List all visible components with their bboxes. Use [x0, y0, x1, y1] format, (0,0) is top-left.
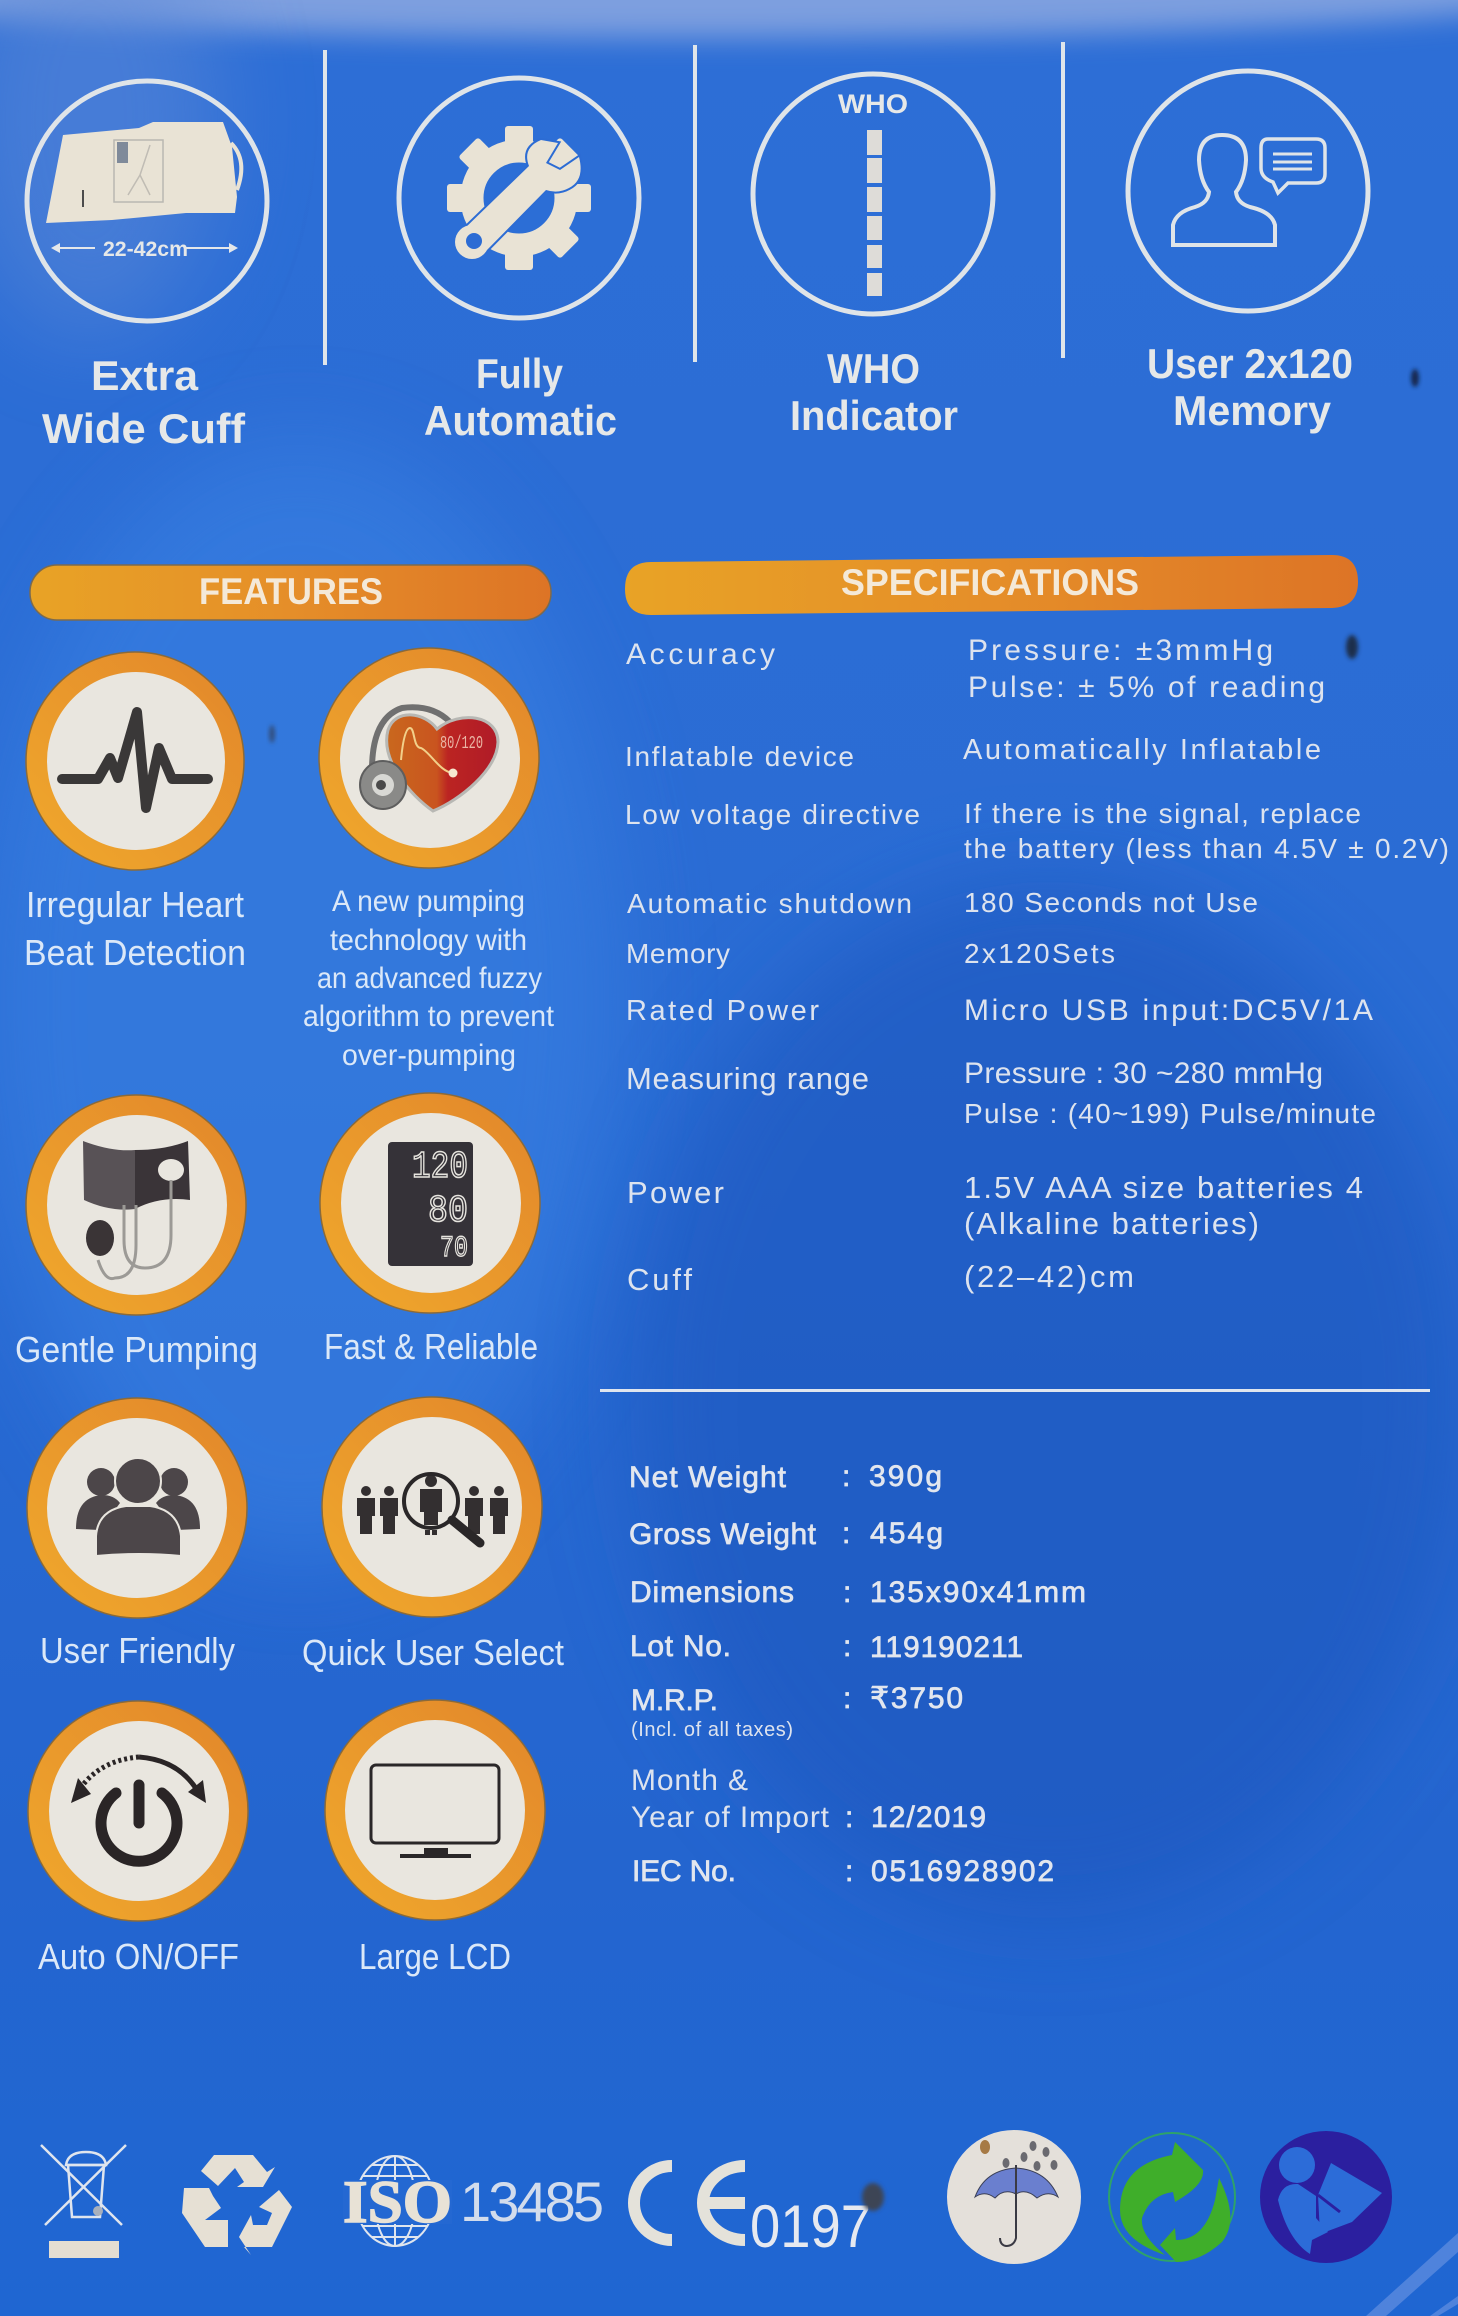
icon: recycling arrows [182, 2155, 292, 2255]
row: Memory: 2x120Sets [964, 938, 1115, 969]
text: pumping technology description: technology with [330, 924, 527, 957]
row: Lot No.: Lot No. [630, 1630, 731, 1663]
heading: FEATURES banner: FEATURES [199, 571, 383, 612]
icon: LCD readings: 70 [440, 1232, 468, 1266]
row: Power: Power [627, 1175, 724, 1210]
heading: Extra Wide Cuff: Wide Cuff [42, 405, 246, 452]
text: Gentle Pumping: Gentle Pumping [15, 1329, 258, 1370]
row: Accuracy: Pressure: ±3mmHg [968, 634, 1273, 667]
icon: heart and stethoscope [319, 648, 539, 868]
row: Lot No.: 119190211 [870, 1631, 1023, 1664]
icon: cuff and pump bulb [26, 1095, 246, 1315]
icon: user with memory bubble [1128, 71, 1368, 311]
text: Irregular Heart Beat Detection: Irregular Heart [26, 884, 244, 925]
panel: top feature icons [27, 42, 1368, 452]
text: Auto ON/OFF: Auto ON/OFF [38, 1936, 239, 1977]
row: Rated Power: Micro USB input:DC5V/1A [964, 994, 1373, 1027]
text: pumping technology description: over-pumping [342, 1039, 516, 1072]
icon: irregular heartbeat [26, 652, 244, 870]
row: Dimensions: : [843, 1576, 851, 1609]
heading: Extra Wide Cuff: Extra [91, 352, 199, 399]
row: Measuring range: Pulse : (40~199) Pulse/minute [964, 1098, 1376, 1129]
row: Gross Weight: Gross Weight [629, 1518, 817, 1551]
text: pumping technology description: an advanced fuzzy [317, 962, 542, 995]
panel: specifications table [625, 634, 1449, 1297]
panel: product details [629, 1460, 1086, 1888]
row: Net Weight: Net Weight [629, 1461, 787, 1494]
icon: keep dry umbrella [947, 2130, 1081, 2264]
heading: User 2x120 Memory [1147, 340, 1353, 434]
icon: magnifier selecting user [322, 1397, 542, 1617]
heading: User 2x120 Memory: User 2x120 [1147, 340, 1353, 387]
icon: WEEE crossed-out bin [41, 2145, 126, 2258]
panel: features [15, 648, 564, 1977]
text: pumping technology description [303, 885, 555, 1072]
row: Net Weight: : [842, 1460, 850, 1493]
icon: ISO 13485 mark [343, 2156, 604, 2246]
heading: FEATURES banner [30, 565, 551, 620]
row: Inflatable device: Inflatable device [625, 741, 854, 772]
row: Accuracy [626, 634, 1325, 704]
row: M.R.P. [631, 1682, 963, 1741]
icon: extra wide cuff: 22-42cm [103, 238, 188, 261]
row: Rated Power [626, 994, 1373, 1027]
row: Power: 1.5V AAA size batteries 4 [964, 1170, 1363, 1205]
row: Lot No.: : [843, 1630, 851, 1663]
row: Low voltage directive: Low voltage directive [625, 799, 920, 830]
heading: Fully Automatic: Fully [476, 350, 564, 397]
row: Automatic shutdown [627, 887, 1258, 919]
row: Month & Year of Import: : [845, 1801, 853, 1834]
row: Month & Year of Import: Year of Import [631, 1801, 830, 1834]
row: Dimensions: Dimensions [630, 1576, 794, 1609]
icon: CE 0197 mark: 0197 [750, 2193, 871, 2260]
text: Fast & Reliable: Fast & Reliable [324, 1326, 538, 1367]
heading: User 2x120 Memory: Memory [1173, 387, 1332, 434]
icon: gear and wrench [399, 78, 639, 318]
row: Lot No. [630, 1630, 1023, 1664]
icon: large LCD monitor [325, 1700, 545, 1920]
row: M.R.P.: : [843, 1682, 851, 1715]
heading: WHO Indicator: WHO [827, 345, 920, 392]
text: Quick User Select: Quick User Select [302, 1632, 564, 1673]
text: pumping technology description: A new pumping [332, 885, 525, 918]
row: Measuring range: Pressure : 30 ~280 mmHg [964, 1057, 1323, 1090]
row: Net Weight: 390g [869, 1460, 942, 1493]
icon: LCD readings: 120 [412, 1146, 468, 1189]
text: pumping technology description: algorithm to prevent [303, 1000, 555, 1033]
row: Accuracy: Pulse: ± 5% of reading [968, 671, 1325, 704]
row: IEC No.: : [845, 1855, 853, 1888]
row: IEC No.: IEC No. [632, 1855, 736, 1888]
row: Measuring range: Measuring range [626, 1061, 869, 1096]
row: Inflatable device: Automatically Inflatable [963, 734, 1321, 766]
row: IEC No. [632, 1855, 1054, 1888]
row: Automatic shutdown: Automatic shutdown [627, 888, 912, 919]
icon: heart and stethoscope: 80/120 [440, 734, 483, 754]
icon: extra wide cuff [27, 81, 267, 321]
row: Gross Weight [629, 1517, 943, 1551]
row: Cuff: Cuff [627, 1262, 692, 1297]
heading: Fully Automatic: Automatic [424, 397, 617, 444]
row: Power [627, 1170, 1363, 1241]
text: Large LCD: Large LCD [359, 1936, 511, 1977]
row: Accuracy: Accuracy [626, 638, 775, 671]
heading: Fully Automatic [424, 350, 617, 444]
row: IEC No.: 0516928902 [871, 1855, 1054, 1888]
row: M.R.P.: ₹3750 [870, 1682, 963, 1715]
row: Dimensions [630, 1576, 1086, 1609]
text: User Friendly: User Friendly [40, 1630, 235, 1671]
row: Power: (Alkaline batteries) [964, 1206, 1259, 1241]
row: Month & Year of Import [631, 1764, 986, 1834]
heading: WHO Indicator: Indicator [790, 392, 958, 439]
icon: user group [27, 1398, 247, 1618]
row: Inflatable device [625, 734, 1321, 772]
row: Rated Power: Rated Power [626, 995, 819, 1027]
text: Irregular Heart Beat Detection: Beat Detection [24, 932, 246, 973]
icon: green dot recycling [1109, 2133, 1235, 2262]
row: Automatic shutdown: 180 Seconds not Use [964, 887, 1258, 918]
row: Measuring range [626, 1057, 1376, 1129]
icon: ISO 13485 mark: 13485 [460, 2170, 604, 2233]
heading: WHO Indicator [790, 345, 958, 439]
row: Memory: Memory [626, 938, 730, 969]
row: Cuff: (22–42)cm [964, 1259, 1134, 1294]
row: Low voltage directive [625, 798, 1449, 864]
row: Gross Weight: 454g [870, 1517, 943, 1550]
row: Month & Year of Import: Month & [631, 1764, 748, 1797]
row: M.R.P.: M.R.P. [631, 1684, 718, 1717]
row: Low voltage directive: the battery (less than 4.5V ± 0.2V) [964, 833, 1449, 864]
icon: LCD readings: 80 [428, 1190, 468, 1233]
text: Irregular Heart Beat Detection [24, 884, 246, 973]
icon: WHO indicator: WHO [838, 89, 908, 119]
icon: read the manual [1260, 2131, 1392, 2263]
heading: SPECIFICATIONS banner [625, 555, 1358, 615]
icon: LCD readings [320, 1093, 540, 1313]
icon: ISO 13485 mark: ISO [343, 2169, 452, 2235]
icon: WHO indicator [753, 74, 993, 314]
icon: CE 0197 mark [634, 2166, 884, 2260]
heading: SPECIFICATIONS banner: SPECIFICATIONS [841, 562, 1139, 603]
row: Month & Year of Import: 12/2019 [871, 1801, 986, 1834]
heading: Extra Wide Cuff [42, 352, 246, 452]
row: Memory [626, 938, 1115, 969]
row: M.R.P.: (Incl. of all taxes) [631, 1719, 793, 1741]
row: Low voltage directive: If there is the signal, replace [964, 798, 1361, 829]
row: Gross Weight: : [842, 1517, 850, 1550]
row: Cuff [627, 1259, 1134, 1297]
row: Dimensions: 135x90x41mm [870, 1576, 1086, 1609]
icon: auto power [28, 1701, 248, 1921]
row: Net Weight [629, 1460, 942, 1494]
panel: certification marks [41, 2130, 1392, 2264]
